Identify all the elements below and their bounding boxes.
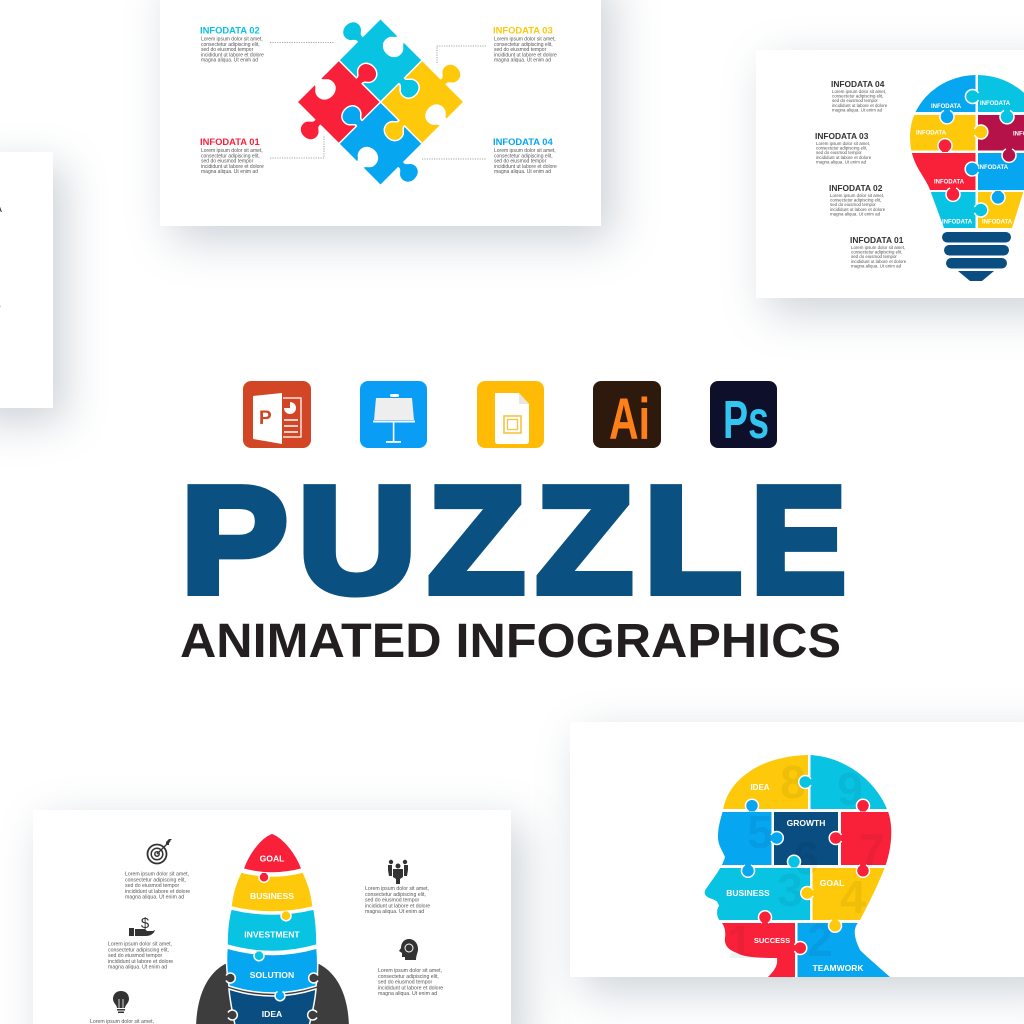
bulb glass puzzle pieces: INFODATA bbox=[916, 130, 947, 136]
text: goal description: consectetur adipiscing elit, bbox=[125, 877, 186, 883]
text: goal description: Lorem ipsum dolor sit amet, bbox=[125, 872, 189, 878]
text: infodata 04: sed do eiusmod tempor bbox=[494, 158, 547, 164]
text: infodata 02: INFODATA 02 bbox=[200, 24, 260, 36]
text: infodata 01: magna aliqua. Ut enim ad bbox=[851, 263, 902, 268]
text: infodata 01: sed do eiusmod tempor bbox=[851, 254, 897, 259]
bulb glass puzzle pieces: INFODATA bbox=[934, 180, 965, 186]
text: infodata 01: INFODATA 01 bbox=[200, 136, 260, 147]
text: head description: magna aliqua. Ut enim ad bbox=[378, 991, 437, 997]
text: infodata 03: Lorem ipsum dolor sit amet, bbox=[816, 141, 870, 146]
text: infodata 04 bbox=[831, 79, 888, 112]
text: infodata 04: Lorem ipsum dolor sit amet, bbox=[832, 89, 886, 94]
bulb glass puzzle pieces bbox=[905, 70, 1024, 228]
head labels: GROWTH bbox=[787, 818, 825, 828]
text: head description: consectetur adipiscing elit, bbox=[378, 974, 439, 980]
faint numbers: 8 bbox=[780, 756, 806, 808]
text: infodata 02: Lorem ipsum dolor sit amet, bbox=[830, 193, 884, 198]
text: team description: sed do eiusmod tempor bbox=[365, 898, 419, 904]
text: infodata 04 bbox=[493, 136, 557, 175]
text: infodata 01: incididunt ut labore et dolore bbox=[851, 259, 907, 264]
text: infodata 03: consectetur adipiscing elit, bbox=[494, 42, 553, 48]
bulb glass puzzle pieces: INFODATA bbox=[931, 104, 962, 110]
text: infodata 03: sed do eiusmod tempor bbox=[494, 47, 547, 53]
text: team description: magna aliqua. Ut enim ad bbox=[365, 909, 424, 915]
text: goal description: sed do eiusmod tempor bbox=[125, 883, 179, 889]
title: P bbox=[181, 455, 288, 624]
text: infodata 02: INFODATA 02 bbox=[829, 183, 883, 193]
text: investment description: Lorem ipsum dolor sit amet, bbox=[108, 942, 172, 948]
rocket labels: IDEA bbox=[262, 1009, 282, 1019]
faint numbers: 7 bbox=[859, 824, 885, 876]
head labels: BUSINESS bbox=[726, 888, 770, 898]
faint numbers: 6 bbox=[793, 832, 819, 884]
text: infodata 01: INFODATA 01 bbox=[850, 235, 904, 245]
text: infodata 03: INFODATA 03 bbox=[493, 24, 553, 36]
text: infodata 02: incididunt ut labore et dolore bbox=[201, 52, 264, 58]
icon: powerpoint bbox=[243, 381, 311, 448]
text: infodata 03 bbox=[493, 24, 557, 64]
icon: light bulb bbox=[113, 991, 129, 1013]
faint numbers: 1 bbox=[727, 916, 753, 968]
text: infodata 04: consectetur adipiscing elit, bbox=[832, 94, 884, 99]
text: head description: incididunt ut labore et dolore bbox=[378, 985, 443, 991]
panel: left cropped slide bbox=[0, 152, 53, 408]
title: Z bbox=[536, 455, 633, 624]
head puzzle pieces bbox=[700, 750, 902, 977]
panel: rocket infographic bbox=[33, 810, 511, 1024]
text: investment description: consectetur adipiscing elit, bbox=[108, 947, 169, 953]
text: goal description: magna aliqua. Ut enim ad bbox=[125, 895, 184, 901]
text: infodata 03: Lorem ipsum dolor sit amet, bbox=[494, 36, 556, 42]
title: E bbox=[751, 455, 846, 624]
text: infodata 03: magna aliqua. Ut enim ad bbox=[816, 159, 867, 164]
text: team description: incididunt ut labore et dolore bbox=[365, 903, 430, 909]
icon: target bbox=[148, 839, 172, 864]
text: infodata 04: INFODATA 04 bbox=[831, 79, 885, 89]
text: infodata 03: incididunt ut labore et dolore bbox=[816, 155, 872, 160]
title: Z bbox=[428, 455, 525, 624]
icon: adobe illustrator bbox=[593, 381, 661, 452]
text: infodata 02: sed do eiusmod tempor bbox=[201, 47, 254, 53]
panel: square puzzle infographic bbox=[160, 0, 601, 226]
text: infodata 04: sed do eiusmod tempor bbox=[832, 98, 878, 103]
icon: team bbox=[388, 860, 408, 884]
text: head description: sed do eiusmod tempor bbox=[378, 980, 432, 986]
rocket labels: SOLUTION bbox=[250, 970, 294, 980]
text: infodata 02: magna aliqua. Ut enim ad bbox=[201, 58, 258, 64]
title bbox=[181, 455, 846, 624]
icon: google slides bbox=[477, 381, 544, 448]
title: U bbox=[298, 455, 416, 624]
text: infodata 02: incididunt ut labore et dolore bbox=[830, 207, 886, 212]
text: head description: Lorem ipsum dolor sit amet, bbox=[378, 968, 442, 974]
head labels: IDEA bbox=[750, 783, 770, 792]
text: infodata 02: Lorem ipsum dolor sit amet, bbox=[201, 36, 263, 42]
text: investment description: sed do eiusmod tempor bbox=[108, 953, 162, 959]
text: infodata 04: magna aliqua. Ut enim ad bbox=[832, 107, 883, 112]
text: infodata 01: Lorem ipsum dolor sit amet, bbox=[851, 245, 905, 250]
head labels bbox=[726, 783, 864, 973]
text: goal description: incididunt ut labore et dolore bbox=[125, 889, 190, 895]
text: investment description: incididunt ut labore et dolore bbox=[108, 959, 173, 965]
bulb glass puzzle pieces: INFODATA bbox=[942, 220, 973, 226]
dotted connector lines bbox=[270, 42, 486, 159]
text: investment description: magna aliqua. Ut enim ad bbox=[108, 965, 167, 971]
icon: hand with dollar bbox=[129, 915, 155, 936]
rocket fins bbox=[196, 964, 349, 1024]
text: infodata 03: consectetur adipiscing elit, bbox=[816, 146, 868, 151]
rocket connector knobs bbox=[226, 873, 318, 1020]
text: infodata 02: consectetur adipiscing elit, bbox=[201, 42, 260, 48]
text: infodata 02 bbox=[829, 183, 886, 216]
text: infodata 04: incididunt ut labore et dolore bbox=[832, 103, 888, 108]
icon: keynote bbox=[360, 381, 427, 448]
text: infodata 02: sed do eiusmod tempor bbox=[830, 202, 876, 207]
text: infodata 03: magna aliqua. Ut enim ad bbox=[494, 58, 551, 64]
icon: head with gear bbox=[399, 939, 418, 960]
text: infodata 04: INFODATA 04 bbox=[493, 136, 554, 147]
text: infodata 04: incididunt ut labore et dolore bbox=[494, 164, 557, 170]
text: infodata 02: magna aliqua. Ut enim ad bbox=[830, 211, 881, 216]
faint numbers: 2 bbox=[807, 914, 833, 966]
text: infodata 02: consectetur adipiscing elit, bbox=[830, 198, 882, 203]
head labels: GOAL bbox=[820, 878, 844, 888]
text: team description: Lorem ipsum dolor sit amet, bbox=[365, 886, 429, 892]
text: infodata 01: sed do eiusmod tempor bbox=[201, 158, 254, 164]
faint numbers: 3 bbox=[777, 864, 803, 916]
text: team description: consectetur adipiscing elit, bbox=[365, 892, 426, 898]
faint numbers bbox=[727, 756, 885, 968]
panel: puzzle head infographic bbox=[570, 722, 1024, 977]
head labels: SUCCESS bbox=[754, 936, 790, 945]
text: infodata 04: consectetur adipiscing elit, bbox=[494, 153, 553, 159]
text: infodata 02 bbox=[200, 24, 264, 64]
text: infodata 03: INFODATA 03 bbox=[815, 131, 869, 141]
text: infodata 03: sed do eiusmod tempor bbox=[816, 150, 862, 155]
rocket labels: BUSINESS bbox=[250, 891, 294, 901]
faint numbers: 5 bbox=[747, 806, 773, 858]
bulb glass puzzle pieces: INFODATA bbox=[978, 165, 1009, 171]
text: infodata 01: Lorem ipsum dolor sit amet, bbox=[201, 148, 263, 154]
text: infodata 03 bbox=[815, 131, 872, 164]
faint numbers: 4 bbox=[840, 871, 866, 923]
title: L bbox=[644, 455, 742, 624]
bulb glass puzzle pieces: INFODATA bbox=[980, 101, 1011, 107]
icon: powerpoint: P bbox=[259, 408, 272, 429]
text: infodata 01: consectetur adipiscing elit, bbox=[851, 250, 902, 255]
text: infodata 01: consectetur adipiscing elit, bbox=[201, 153, 260, 159]
panel: light bulb infographic bbox=[756, 50, 1024, 298]
icon: adobe photoshop bbox=[710, 381, 777, 450]
rocket labels: INVESTMENT bbox=[244, 930, 300, 940]
subtitle: ANIMATED INFOGRAPHICS bbox=[180, 614, 841, 668]
puzzle diamond of four pieces bbox=[269, 0, 492, 214]
text: infodata 03: incididunt ut labore et dolore bbox=[494, 52, 557, 58]
text: infodata 04: Lorem ipsum dolor sit amet, bbox=[494, 148, 556, 154]
rocket body segments bbox=[227, 833, 318, 1024]
rocket labels: GOAL bbox=[260, 854, 284, 864]
software icons row bbox=[243, 381, 777, 448]
text: infodata 01 bbox=[850, 235, 907, 268]
bulb glass puzzle pieces: INFODATA bbox=[982, 220, 1013, 226]
text: infodata 01: incididunt ut labore et dolore bbox=[201, 164, 264, 170]
icon: hand with dollar: $ bbox=[141, 915, 150, 932]
head labels: TEAMWORK bbox=[812, 963, 864, 973]
cropped label marks bbox=[0, 207, 2, 310]
text: infodata 01 bbox=[200, 136, 264, 175]
text: infodata 04: magna aliqua. Ut enim ad bbox=[494, 169, 551, 175]
faint numbers: 9 bbox=[837, 763, 863, 815]
rocket labels bbox=[244, 854, 300, 1019]
puzzle knobs bbox=[742, 776, 870, 955]
bulb screw base bbox=[942, 232, 1011, 281]
text: infodata 01: magna aliqua. Ut enim ad bbox=[201, 169, 258, 175]
